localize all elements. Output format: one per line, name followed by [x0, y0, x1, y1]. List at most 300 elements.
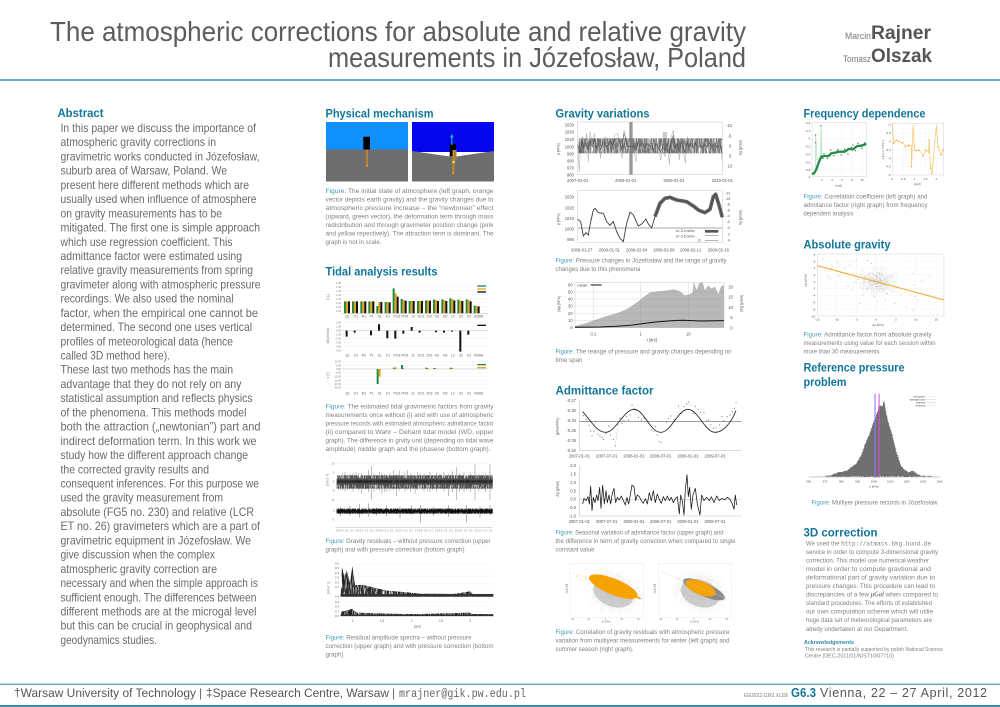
- chart: gravity residuals: -5: [332, 489, 335, 493]
- chart: pressure time series 2007-2010: 990: [567, 151, 575, 156]
- chart: pressure and gravity range detail: δg [μGal]: [738, 210, 742, 225]
- bar chart: difference in gravity unit: δA [nm/s²]: [326, 328, 330, 343]
- scatter plot: absolute gravity: -10: [835, 318, 839, 322]
- caption: correlation of gravity residuals: summer season (right graph).: [556, 646, 634, 653]
- abstract text: gravimeter along with atmospheric pressure: [60, 278, 260, 291]
- chart: pressure and gravity range detail: 2008-01-31: [599, 248, 621, 253]
- bar chart: difference in gravity unit: Q1: [345, 353, 350, 357]
- abstract text: sufficient enough. The differences between: [60, 591, 256, 604]
- chart: pressure time series 2007-2010: -10: [726, 123, 733, 128]
- scatter plot: absolute gravity: 6: [814, 259, 816, 263]
- bar chart: difference in gravity unit: -2.00: [335, 338, 342, 341]
- chart: admittance factor by frequency: 2: [935, 177, 937, 181]
- footer: affiliations: [14, 686, 526, 701]
- chart: multiyear pressure histogram: 960: [806, 479, 811, 483]
- 3D correction text: alredy undertaken at our Department.: [806, 626, 908, 633]
- abstract text: indirect deformation term. In this work we: [60, 435, 256, 448]
- bar chart: tidal phases: N2: [435, 392, 439, 396]
- bar chart: tidal phases: K1: [386, 392, 390, 396]
- bar chart: tidal phases: -20.00: [334, 383, 342, 386]
- abstract text: present here different methods which are: [60, 179, 249, 192]
- heading: physical mechanism: Physical mechanism: [326, 106, 434, 120]
- scatter plot: summer season: δp [hPa]: [690, 622, 699, 624]
- diagram: initial state of atmosphere: [326, 122, 408, 182]
- abstract text: but this can be crucial in geophysical and: [60, 620, 252, 633]
- caption: range of pressure and gravity: time span: [556, 357, 583, 364]
- chart: pressure time series 2007-2010: 2007-01-01: [567, 178, 589, 183]
- scatter plot: absolute gravity: 5: [895, 318, 897, 322]
- chart: pressure time series 2007-2010: [556, 122, 742, 183]
- chart: seasonal admittance factor: 2009-01-01: [677, 453, 699, 458]
- authors: Marcin: [845, 31, 871, 41]
- heading: gravity variations: Gravity variations: [556, 106, 650, 120]
- chart: admittance factor by frequency: α [nm s⁻² hPa⁻¹]: [881, 140, 885, 159]
- footer: affiliations: †Warsaw University of Technology: [14, 686, 197, 700]
- scatter plot: absolute gravity: 4: [814, 266, 816, 270]
- 3D correction text: discrepancies of a few μGal when compared to: [806, 592, 938, 599]
- bar chart: tidal phases: PHI1: [401, 392, 409, 396]
- footer: conference: G6.3: [791, 686, 816, 700]
- chart: residual amplitude spectra: 0.0: [335, 614, 339, 618]
- caption: residual amplitude spectra: Figure: Residual amplitude spectra – without pressure: [326, 634, 472, 642]
- bar chart: tidal phases: L2: [451, 392, 455, 396]
- chart: multiyear pressure histogram: mediana: [915, 403, 926, 407]
- chart: multiyear pressure histogram: 1000: [871, 479, 878, 483]
- panel: tidal analysis results: [326, 264, 494, 658]
- chart: seasonal admittance factor: [μGal/hPa]: [556, 418, 560, 435]
- chart: difference in gravity correction: 2008-01-01: [623, 519, 645, 524]
- chart: difference in gravity correction: Δg [μGal]: [556, 481, 560, 497]
- bar chart: difference in gravity unit: 2.00: [336, 322, 342, 325]
- chart: residual amplitude spectra: 0.3: [335, 600, 339, 604]
- chart: pressure time series 2007-2010: p [hPa]: [556, 143, 560, 155]
- 3D correction text: deformational part of gravity variation due to: [806, 575, 935, 582]
- heading: frequency dependence: Frequency dependence: [804, 106, 926, 120]
- bar chart: difference in gravity unit: [326, 322, 488, 357]
- chart: pressure and gravity range detail: δ₀: [698, 239, 702, 243]
- scatter plot: absolute gravity: -15: [815, 318, 820, 322]
- bar chart: difference in gravity unit: P1: [370, 353, 374, 357]
- chart: difference in gravity correction: 2009-01-01: [677, 519, 699, 524]
- chart: pressure time series 2007-2010: 10: [728, 164, 733, 169]
- abstract text: gravimetric works conducted in Józefosław,: [60, 150, 260, 163]
- chart: multiyear pressure histogram: 1010: [887, 479, 894, 483]
- chart: range of pressure and gravity vs time span: 60: [568, 283, 573, 288]
- chart: pressure time series 2007-2010: 0: [729, 143, 732, 148]
- heading: 3D correction: 3D correction: [804, 526, 878, 540]
- bar chart: tidal phases: -25.00: [334, 387, 342, 390]
- caption: tidal factors: graph). The difference in grvity unit (depending on tidal wave: [326, 438, 494, 444]
- bar chart: tidal phases: -5.00: [335, 372, 342, 375]
- scatter plot: summer season: -20: [659, 619, 663, 621]
- caption: residual amplitude spectra: [326, 634, 494, 658]
- footer: conference: EGU2012-11661 XL156: [744, 693, 788, 699]
- caption: range of pressure and gravity: [556, 348, 732, 364]
- chart: gravity residuals: [nm s⁻²]: [326, 474, 330, 486]
- bar chart: tidal gravimetric factors: M2: [443, 315, 448, 319]
- caption: tidal factors: pressure records with estimated atmospheric admittance factor: [326, 420, 494, 428]
- chart: multiyear pressure histogram: bisphas: [916, 400, 926, 404]
- caption: gravity residuals: Figure: Gravity residuals – without pressure correction (upper: [326, 538, 491, 545]
- chart: range of pressure and gravity vs time span: 10: [686, 331, 691, 336]
- bar chart: tidal gravimetric factors: [326, 282, 488, 319]
- chart: admittance factor by frequency: -2.5: [886, 131, 891, 135]
- scatter plot: winter season: δp [hPa]: [602, 622, 611, 624]
- chart: pressure and gravity range detail: 990: [567, 237, 575, 242]
- chart: range of pressure and gravity vs time span: 1: [640, 331, 643, 336]
- abstract text: determined. The second one uses vertical: [60, 321, 252, 334]
- bar chart: tidal phases: J1: [411, 392, 415, 396]
- chart: correlation coefficient: -1: [808, 175, 811, 179]
- bar chart: tidal phases: M2: [443, 392, 448, 396]
- chart: pressure time series 2007-2010: -5: [728, 133, 732, 138]
- chart: gravity residuals: 5: [333, 470, 335, 474]
- chart: seasonal admittance factor: -0.33: [567, 418, 577, 423]
- abstract text: different methods are at the microgal level: [60, 606, 256, 618]
- chart: range of pressure and gravity vs time span: [557, 282, 743, 342]
- scatter plot: absolute gravity: Δp [hPa]: [872, 323, 884, 327]
- bar chart: tidal gravimetric factors: 1.40: [336, 282, 342, 285]
- chart: residual amplitude spectra: [326, 562, 493, 628]
- chart: range of pressure and gravity vs time span: t [dni]: [647, 337, 657, 342]
- chart: admittance factor by frequency: -3: [888, 140, 891, 144]
- scatter plot: absolute gravity: Δg [μGal]: [804, 274, 808, 287]
- scatter plot: summer season: 10: [709, 619, 712, 621]
- abstract text: on gravity measurements has to be: [60, 207, 222, 220]
- bar chart: difference in gravity unit: 0.00: [336, 330, 342, 333]
- scatter plot: absolute gravity: [804, 253, 944, 327]
- chart: seasonal admittance factor: -0.39: [567, 438, 577, 443]
- chart: admittance factor by frequency: 1.5: [923, 177, 928, 181]
- chart: multiyear pressure histogram: histogram: [914, 394, 926, 398]
- chart: residual amplitude spectra: 0.5: [335, 566, 339, 570]
- caption: gravity residuals: graph) and with pressure correction (bottom graph): [326, 546, 464, 554]
- chart: correlation coefficient: 10: [860, 178, 864, 182]
- chart: range of pressure and gravity vs time span: 20: [728, 284, 734, 289]
- abstract text: admittance factor were estimated using: [60, 250, 242, 263]
- scatter plot: winter season: 20: [637, 619, 640, 621]
- caption: physical mechanism: and yellow repectively). The attraction term is dominant. The: [326, 230, 494, 238]
- chart: difference in gravity correction: -0.5: [569, 505, 577, 510]
- chart: gravity residuals: -5: [332, 518, 335, 522]
- chart: residual amplitude spectra: 1: [352, 619, 354, 623]
- panel: absolute gravity: [804, 238, 944, 356]
- chart: gravity residuals: 0: [333, 509, 335, 513]
- 3D correction text: model in order to compute gravtional and: [806, 566, 931, 573]
- authors: [843, 23, 932, 67]
- chart: pressure and gravity range detail: -4: [726, 213, 731, 218]
- caption: frequency dependence: dependent analysis: [804, 210, 854, 218]
- chart: difference in gravity correction: 2007-07-01: [596, 519, 618, 524]
- scatter plot: summer season: -10: [675, 619, 679, 621]
- chart: range of pressure and gravity vs time span: |δg| [μGal]: [739, 295, 743, 312]
- bar chart: tidal phases: 5.00: [336, 364, 342, 367]
- chart: pressure time series 2007-2010: 960: [567, 172, 575, 177]
- chart: correlation coefficient: [805, 121, 866, 188]
- footer: affiliations: mrajner@gik.pw.edu.pl: [399, 687, 526, 701]
- bar chart: tidal gravimetric factors: Q1: [345, 315, 350, 319]
- bar chart: difference in gravity unit: 2N2: [426, 353, 433, 357]
- chart: multiyear pressure histogram: p [hPa]: [870, 484, 879, 488]
- chart: correlation coefficient: 0.2: [806, 129, 811, 133]
- chart: pressure and gravity range detail: 1020: [565, 205, 575, 210]
- bar chart: difference in gravity unit: PHI1: [401, 353, 409, 357]
- abstract text: absolute (FG5 no. 230) and relative (LCR: [60, 506, 254, 519]
- caption: physical mechanism: [326, 188, 494, 246]
- caption: physical mechanism: redistribution and through gravimeter position change (pink: [326, 222, 494, 229]
- caption: tidal factors: measurements once without (i) and with use of atmospheric: [326, 412, 494, 419]
- scatter plot: absolute gravity: -6: [813, 301, 816, 305]
- bar chart: tidal phases: Q1: [345, 392, 350, 396]
- bar chart: tidal gravimetric factors: δ [-]: [326, 294, 330, 300]
- chart: residual amplitude spectra: 0.1: [335, 609, 339, 613]
- 3D correction text: pressure changes. This procedure can lead to: [806, 583, 935, 590]
- bar chart: tidal phases: P1: [370, 392, 374, 396]
- bar chart: difference in gravity unit: M3M6: [474, 353, 483, 357]
- caption: tidal factors: amplitude) middle graph and the phasese (bottom graph).: [326, 446, 491, 453]
- bar chart: tidal gravimetric factors: P1: [370, 315, 374, 319]
- chart: pressure and gravity range detail: p [hPa]: [556, 213, 560, 225]
- abstract text: called 3D method here).: [60, 350, 170, 362]
- chart: correlation coefficient: 0.4: [806, 121, 811, 125]
- chart: difference in gravity correction: 2.0: [570, 463, 577, 468]
- caption: absolute gravity: [804, 332, 936, 356]
- chart: seasonal admittance factor: 2007-01-01: [569, 453, 591, 458]
- chart: pressure and gravity range detail: 2008-02-16: [708, 248, 730, 253]
- chart: residual amplitude spectra: 0.3: [335, 576, 339, 580]
- abstract text: which use regression coefficient. This: [60, 236, 233, 249]
- bar chart: tidal gravimetric factors: M3M6: [474, 315, 483, 319]
- abstract text: statistical assumption and reflects physics: [60, 392, 253, 405]
- scatter plot: winter season: 0: [604, 619, 606, 621]
- chart: pressure and gravity range detail: α=-3.4 nm/s²: [676, 229, 696, 233]
- chart: pressure and gravity range detail: 1000: [565, 226, 575, 231]
- chart: pressure and gravity range detail: 2008-02-04: [626, 248, 648, 253]
- abstract text: gravimetric equipment in Józefosław. We: [60, 534, 251, 547]
- chart: multiyear pressure histogram: [806, 394, 943, 488]
- caption: seasonal variation: Figure: Seasonal variation of admittance factor (upper graph) and: [556, 530, 724, 536]
- chart: correlation coefficient: -0.8: [805, 168, 811, 172]
- bar chart: difference in gravity unit: -1.00: [335, 334, 342, 337]
- 3D correction text: standard procedures. The efforts of established: [806, 600, 932, 607]
- chart: pressure and gravity range detail: 2008-02-08: [653, 248, 675, 253]
- chart: range of pressure and gravity vs time span: 0.1: [590, 331, 597, 336]
- bar chart: tidal gravimetric factors: 1.36: [336, 286, 342, 289]
- bar chart: tidal phases: O1: [354, 392, 358, 396]
- chart: range of pressure and gravity vs time span: 5: [730, 315, 733, 320]
- scatter plot: winter season: -10: [587, 619, 591, 621]
- abstract text: atmospheric gravity correction are: [60, 563, 217, 576]
- abstract text: usually used when influence of atmosphere: [60, 193, 256, 206]
- bar chart: tidal gravimetric factors: 2N2: [426, 315, 433, 319]
- abstract text: relative gravity measurements from spring: [60, 264, 253, 277]
- abstract text: recordings. We also used the nominal: [60, 293, 234, 306]
- chart: correlation coefficient: 6: [841, 178, 843, 182]
- chart: difference in gravity correction: [556, 463, 742, 524]
- bar chart: difference in gravity unit: -4.00: [335, 346, 342, 349]
- chart: seasonal admittance factor: 2008-07-01: [650, 453, 672, 458]
- abstract text: mitigated. The first one is simple approach: [60, 222, 260, 234]
- caption: seasonal variation: constant value: [556, 546, 595, 554]
- bar chart: tidal gravimetric factors: 1.20: [336, 302, 342, 305]
- scatter plot: absolute gravity: 15: [935, 318, 938, 322]
- chart: seasonal admittance factor: [556, 398, 742, 458]
- panel: frequency dependence: [804, 106, 944, 218]
- bar chart: tidal phases: M1: [362, 392, 366, 396]
- bar chart: tidal phases: K2: [467, 392, 471, 396]
- scatter plot: winter season: δg [μGal]: [566, 583, 568, 593]
- caption: correlation of gravity residuals: variation from multiyear measurements for winter (left graph) and: [556, 638, 730, 644]
- chart: correlation coefficient: 2: [821, 178, 823, 182]
- chart: multiyear pressure histogram: 1040: [937, 479, 943, 483]
- scatter plot: winter season: [566, 559, 654, 625]
- bar chart: tidal phases: OO1: [418, 392, 425, 396]
- abstract text: advantage that they do not rely on any: [60, 378, 242, 391]
- chart: pressure and gravity range detail: 1030: [565, 195, 575, 200]
- bar chart: tidal gravimetric factors: 1.28: [336, 294, 342, 297]
- chart: seasonal admittance factor: 2007-07-01: [596, 453, 618, 458]
- chart: pressure time series 2007-2010: 980: [567, 158, 575, 163]
- footer: [0, 684, 1000, 707]
- chart: admittance factor by frequency: -3.5: [886, 148, 891, 152]
- heading: reference pressure problem: [804, 360, 905, 389]
- abstract text: These last two methods has the main: [60, 364, 233, 377]
- caption: pressure changes: changes due to this phenomena: [556, 266, 641, 273]
- title: The atmospheric corrections for absolute and relative gravity: [50, 16, 746, 47]
- chart: gravity residuals: 2004-01-01 2005-01-01 2006-01-01 2007-01-01 2008-01-01 2009-01-01 2010-01-01 2011-01-01: [336, 529, 493, 532]
- chart: seasonal admittance factor: 2008-01-01: [623, 453, 645, 458]
- heading: abstract: Abstract: [58, 106, 104, 120]
- abstract text: both the attraction („newtonian”) part and: [60, 421, 260, 434]
- chart: residual amplitude spectra: 2.5: [439, 619, 443, 623]
- chart: pressure time series 2007-2010: 1010: [565, 137, 575, 142]
- bar chart: tidal gravimetric factors: N2: [435, 315, 439, 319]
- bar chart: difference in gravity unit: -3.00: [335, 342, 342, 345]
- chart: multiyear pressure histogram: 1020: [904, 479, 910, 483]
- scatter plot: summer season: δg [μGal]: [655, 583, 657, 593]
- chart: residual amplitude spectra: 0.0: [335, 595, 339, 599]
- chart: admittance factor by frequency: 0.5: [901, 177, 906, 181]
- bar chart: tidal phases: S1: [378, 392, 382, 396]
- header: title and authors: [50, 16, 932, 73]
- bar chart: tidal gravimetric factors: K1: [386, 315, 390, 319]
- bar chart: tidal phases: M3M6: [474, 392, 483, 396]
- chart: pressure and gravity range detail: 2008-01-27: [571, 248, 593, 253]
- chart: admittance factor by frequency: [881, 123, 944, 186]
- authors: Rajner: [871, 23, 932, 44]
- chart: correlation coefficient: -0.4: [805, 152, 811, 156]
- chart: pressure time series 2007-2010: 2009-01-01: [663, 178, 685, 183]
- chart: residual amplitude spectra: 0.6: [335, 562, 339, 566]
- chart: range of pressure and gravity vs time span: 15: [728, 294, 734, 299]
- bar chart: tidal gravimetric factors: PSI1: [393, 315, 401, 319]
- chart: difference in gravity correction: 0.0: [570, 497, 577, 502]
- panel: abstract: [58, 106, 261, 647]
- abstract text: suburb area of Warsaw, Poland. We: [60, 165, 227, 178]
- chart: range of pressure and gravity vs time span: 50: [568, 290, 573, 295]
- chart: residual amplitude spectra: 0.4: [335, 571, 339, 575]
- bar chart: difference in gravity unit: M2: [443, 353, 448, 357]
- caption: gravity residuals: [326, 538, 491, 554]
- bar chart: tidal phases: 2N2: [426, 392, 433, 396]
- chart: seasonal admittance factor: 2009-07-01: [704, 453, 726, 458]
- chart: multiyear pressure histogram: 990: [855, 479, 860, 483]
- chart: correlation coefficient: [cpd]: [835, 184, 842, 188]
- chart: pressure and gravity range detail: -2: [726, 219, 731, 224]
- caption: pressure changes: [556, 258, 727, 273]
- bar chart: difference in gravity unit: L2: [451, 353, 455, 357]
- 3D correction text: service in order to compute 3-dimensional gravity: [806, 549, 939, 556]
- chart: pressure time series 2007-2010: 970: [567, 166, 575, 171]
- bar chart: tidal gravimetric factors: O1: [354, 315, 358, 319]
- chart: pressure time series 2007-2010: 1000: [565, 144, 575, 149]
- 3D correction text: correction. This model use numerical weather: [806, 558, 930, 565]
- chart: range of pressure and gravity vs time span: 0: [730, 325, 733, 330]
- panel: gravity variations: [556, 106, 743, 364]
- bar chart: difference in gravity unit: M1: [362, 353, 366, 357]
- abstract text: give discussion when the complex: [60, 549, 215, 562]
- bar chart: tidal gravimetric factors: M1: [362, 315, 366, 319]
- scatter plot: absolute gravity: 10: [914, 318, 918, 322]
- chart: residual amplitude spectra: [cpd]: [414, 624, 421, 628]
- chart: range of pressure and gravity vs time span: |δp| [hPa]: [557, 296, 561, 312]
- chart: correlation coefficient: 8: [851, 178, 853, 182]
- scatter plot: absolute gravity: -2: [813, 287, 816, 291]
- chart: gravity residuals: [326, 461, 493, 532]
- authors: Tomasz: [843, 54, 871, 64]
- chart: correlation coefficient: 4: [831, 178, 833, 182]
- abstract text: profiles of meteorological data (hence: [60, 335, 233, 348]
- chart: pressure and gravity range detail: -6: [726, 207, 731, 212]
- chart: pressure and gravity range detail: -10: [725, 196, 731, 201]
- chart: pressure and gravity range detail: 4: [728, 238, 731, 243]
- caption: frequency dependence: admitance factor (right graph) from frequency: [804, 202, 928, 209]
- scatter plot: absolute gravity: 2: [814, 273, 816, 277]
- chart: admittance factor by frequency: -4.5: [886, 165, 891, 169]
- chart: difference in gravity correction: 0.5: [570, 488, 577, 493]
- bar chart: tidal phases: [326, 361, 488, 396]
- chart: difference in gravity correction: 2009-07-01: [704, 519, 726, 524]
- chart: pressure time series 2007-2010: 5: [729, 154, 732, 159]
- abstract text: the corrected gravity results and: [60, 463, 209, 476]
- 3D correction text: our own computation scheme which will utilie: [806, 609, 933, 616]
- chart: range of pressure and gravity vs time span: 10: [728, 305, 734, 310]
- chart: multiyear pressure histogram: 970: [823, 479, 828, 483]
- abstract text: of the phenomena. This methods model: [60, 406, 246, 419]
- scatter plot: absolute gravity: -8: [813, 307, 816, 311]
- panel: 3D correction: [804, 526, 943, 660]
- bar chart: difference in gravity unit: J1: [411, 353, 415, 357]
- caption: residual amplitude spectra: graph): [326, 652, 344, 658]
- abstract text: ET no. 26) gravimeters which are a part of: [60, 520, 261, 533]
- scatter plot: summer season: [655, 559, 739, 624]
- caption: physical mechanism: vector depicts earth gravity) and the gravity changes due to: [326, 196, 494, 204]
- chart: admittance factor by frequency: -5: [888, 173, 891, 177]
- abstract text: study how the different approach change: [60, 449, 248, 462]
- abstract text: factor, when the empirical one cannot be: [60, 307, 258, 320]
- scatter plot: winter season: 10: [620, 619, 624, 621]
- caption: correlation of gravity residuals: Figure: Correlation of gravity residuals with atmospheric pressure: [556, 629, 730, 636]
- bar chart: difference in gravity unit: K1: [386, 353, 390, 357]
- chart: pressure and gravity range detail: α=-3.5 nm/s²: [676, 234, 696, 238]
- bar chart: tidal phases: PSI1: [393, 392, 401, 396]
- caption: seasonal variation: [556, 530, 736, 554]
- panel: reference pressure problem: [804, 360, 943, 506]
- chart: admittance factor by frequency: 0: [891, 177, 893, 181]
- bar chart: difference in gravity unit: O1: [354, 353, 358, 357]
- scatter plot: absolute gravity: 8: [814, 253, 816, 257]
- bar chart: tidal gravimetric factors: L2: [451, 315, 455, 319]
